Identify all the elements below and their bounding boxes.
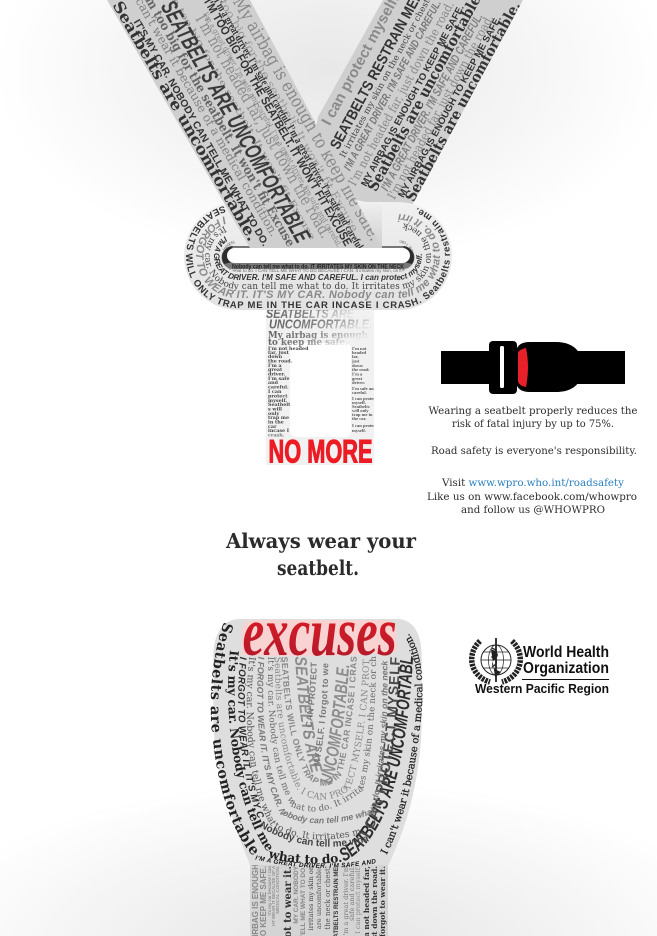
left seatbelt strap: Seatbelts are uncomfortable. [109, 0, 262, 244]
info text block [427, 405, 638, 516]
WHO emblem [472, 638, 520, 682]
info text block: Like us on www.facebook.com/whowpro [427, 491, 637, 503]
info text block: risk of fatal injury by up to 75%. [452, 418, 614, 430]
lower seatbelt strap: irritates my skin on [307, 866, 315, 930]
WHO logo: Organization [523, 660, 609, 677]
tongue left text column: I can [268, 389, 282, 395]
lower seatbelt strap: forgot to wear it. [378, 866, 387, 936]
info text block: and follow us @WHOWPRO [461, 504, 605, 516]
right seatbelt strap [316, 0, 523, 204]
curved excuses text rings: SEATBELTS ARE UNCOMFORTABLE [340, 657, 413, 861]
tongue left text column: protect [268, 394, 288, 400]
tongue left text column: the road. [268, 358, 293, 364]
tongue right text column [352, 347, 374, 433]
WHO logo: Western Pacific Region [475, 681, 609, 696]
tongue right text column: I can protect [352, 396, 377, 401]
tongue heading text: SEATBELTS ARE [266, 306, 354, 321]
left seatbelt strap: I'M TOO BIG FOR THE SEATBELT. IT WON'T FIT EXCUSE [201, 0, 355, 248]
curved excuses text rings: SEATBELTS WILL ONLY TRAP ME IN THE CAR INCASE I CRASH. [282, 656, 357, 786]
NO MORE: NO MORE [268, 434, 372, 470]
tongue right text column: headed [352, 350, 366, 355]
WHO logo [472, 638, 609, 696]
tongue left text column: s will [268, 406, 282, 412]
tongue left text column: careful. [268, 384, 289, 390]
tongue right text column: the car. [352, 416, 366, 421]
headline: seatbelt. [277, 556, 359, 580]
headline [225, 529, 417, 580]
headline: Always wear your [225, 529, 417, 553]
tongue left text column: driver. [268, 372, 286, 378]
left seatbelt strap [107, 0, 382, 248]
curved excuses text rings: It's my car. Nobody can tell me what to do. It irritates my [245, 657, 362, 840]
tongue right text column: trap me in [352, 412, 373, 417]
right seatbelt strap: MY AIRBAG IS ENOUGH TO KEEP ME SAFE. [396, 14, 504, 200]
tongue right text column: will only [352, 408, 369, 413]
left seatbelt strap: I'm a great driver. I'm safe and careful. I'm a great driver. I'm safe and careful. [211, 0, 367, 254]
curved excuses text rings: I CAN PROTECT MYSELF [360, 657, 400, 838]
tongue right text column: careful. [352, 390, 367, 395]
curved excuses text rings: I can't wear it because of a medical condition. [380, 634, 423, 855]
right seatbelt strap: It irritates my skin on the neck or chest. [338, 0, 434, 160]
tongue left text column: I'm not headed [268, 346, 309, 352]
curved excuses text rings: Nobody can tell me what to do. I CAN [260, 821, 369, 847]
left seatbelt strap: IT'S MY CAR. NOBODY CAN TELL ME WHAT TO DO. [131, 18, 270, 249]
tongue left text column: and [268, 380, 279, 386]
curved excuses text rings: I FORGOT TO WEAR IT. IT'S MY CAR. [238, 656, 264, 818]
belt loop slot [222, 246, 415, 269]
belt loop with curved text: Nobody can tell me what to do. I CAN TELL ME WHAT TO DO BECAUSE I CAN. It irritates my skin, on the neck or chest. I can protect myself and only really need it for a short trip. [222, 240, 414, 273]
tongue left text column: trap me [268, 415, 289, 421]
curved excuses text rings: MYSELF. I forgot to wear them [314, 663, 329, 766]
left seatbelt strap: I'm not headed far, just down the road. [192, 11, 336, 241]
curved excuses text rings: I'M A GREAT DRIVER. I'M SAFE AND CAREFUL. [255, 855, 376, 868]
tongue left text column: crash. [268, 432, 285, 438]
tongue left text column: only [268, 411, 280, 417]
tongue right text column: down [352, 363, 363, 368]
tongue right text column: far, [352, 354, 359, 359]
tongue heading text: to keep me safe. [268, 337, 348, 348]
curved excuses text rings: Seatbelts are uncomfortable. I CAN PROTECT MYSELF. I CAN PROTECT MYSELF. [274, 658, 370, 800]
tongue heading text [266, 306, 372, 348]
tongue right text column: the road. [352, 367, 370, 372]
left seatbelt strap: I'm a great driver, I'm safe and careful. I'm a great driver, I'm safe and careful. [201, 10, 344, 249]
belt loop with curved text: I'M A GREAT DRIVER. I'M SAFE AND CAREFUL. I can protect myself. [214, 236, 422, 282]
tongue left text column: I'm safe [268, 376, 289, 382]
lower seatbelt strap [250, 860, 388, 936]
curved excuses text rings: I FORGOT TO WEAR IT. IT'S MY CAR. Nobody can tell me what to do. It irritates my skin on the neck or chest. [257, 656, 388, 824]
curved excuses text rings: It's my car. Nobody can tell me what to do. It irritates my skin on the neck or chest. [266, 656, 376, 812]
left seatbelt strap: My airbag is enough to keep me safe. [228, 0, 385, 245]
tongue right text column: just [351, 358, 360, 364]
curved excuses text rings: UNCOMFORTABLE. [320, 666, 350, 784]
tongue right text column: I can protect [352, 423, 377, 428]
buckle tongue [266, 305, 377, 470]
curved excuses text rings: SEATBELTS ARE [295, 656, 322, 772]
curved excuses text rings: I CAN PROTECT [305, 662, 317, 733]
excuses word: excuses [243, 594, 397, 670]
lower buckle with curved text [210, 594, 423, 868]
info text block: Road safety is everyone's responsibility. [431, 445, 637, 457]
tongue left text column: great [268, 367, 283, 373]
tongue left text column: in the [268, 420, 284, 426]
lower seatbelt strap: the neck or chest. [324, 866, 332, 930]
tongue heading text: My airbag is enough [268, 330, 368, 341]
buckle plate [213, 619, 422, 865]
left seatbelt strap: SEATBELTS ARE UNCOMFORTABLE [156, 0, 316, 247]
tongue right text column: great [352, 376, 363, 381]
tongue left text column: far, just [268, 350, 290, 356]
tongue left text column: down [268, 354, 283, 360]
tongue left text column: myself. [268, 398, 287, 404]
curved excuses text rings: It's my car. Nobody can tell me what to do. [225, 650, 342, 864]
tongue right text column: myself. [352, 400, 366, 405]
icon: seatbelt buckle [441, 341, 625, 394]
lower seatbelt strap: HT WEAR IT BECAUSE OF A [271, 866, 276, 926]
tongue right text column: I'm safe and [352, 386, 377, 391]
lower seatbelt strap: I'm a great driver. I'm [342, 866, 350, 936]
right seatbelt strap: MY AIRBAG IS ENOUGH TO KEEP ME SAFE. [359, 3, 467, 189]
info text block: Wearing a seatbelt properly reduces the [428, 405, 638, 417]
lower seatbelt strap: I can protect myself. [354, 866, 362, 934]
tongue right text column: myself. [352, 428, 366, 433]
info text block: Visit www.wpro.who.int/roadsafety [441, 477, 624, 489]
curved excuses text rings: Seatbelts are uncomfortable. [210, 622, 257, 854]
belt loop with curved text: It's my car. Nobody can tell me what to do. It irritates my skin on the neck or chest. [204, 223, 431, 291]
tongue left text column: Seatbelt [268, 402, 291, 408]
lower seatbelt strap: It's my car because I can [267, 866, 272, 916]
tongue heading text: UNCOMFORTABLE. [269, 316, 372, 332]
lower seatbelt strap: safe and careful. [348, 866, 356, 921]
loop straight text below slot: Nobody can tell me what to do. IT IRRITATES MY SKIN ON THE NECK [232, 264, 404, 270]
tongue left text column [268, 346, 309, 438]
tongue left text column: I'm a [268, 363, 282, 369]
tongue left text column: car [268, 424, 277, 430]
tongue left text column: incase I [268, 428, 290, 434]
lower seatbelt strap: are uncomfortable. [315, 866, 323, 929]
lower seatbelt strap: MY CAR. NOBODY [293, 865, 300, 924]
WHO logo: World Health [523, 644, 609, 661]
tongue right text column: I'm not [352, 346, 367, 351]
tongue right text column: driver. [352, 380, 365, 385]
tongue right text column: I'm a [352, 372, 363, 376]
lower seatbelt strap: MEDICAL CONDITION. [275, 866, 280, 914]
tongue right text column: Seatbelts [352, 404, 370, 409]
belt loop with curved text: SEATBELTS WILL ONLY TRAP ME IN THE CAR INCASE I CRASH. Seatbelts restrain me. [186, 206, 450, 308]
strap shadow fade over loop [356, 200, 382, 248]
pink highlight band [242, 620, 397, 656]
